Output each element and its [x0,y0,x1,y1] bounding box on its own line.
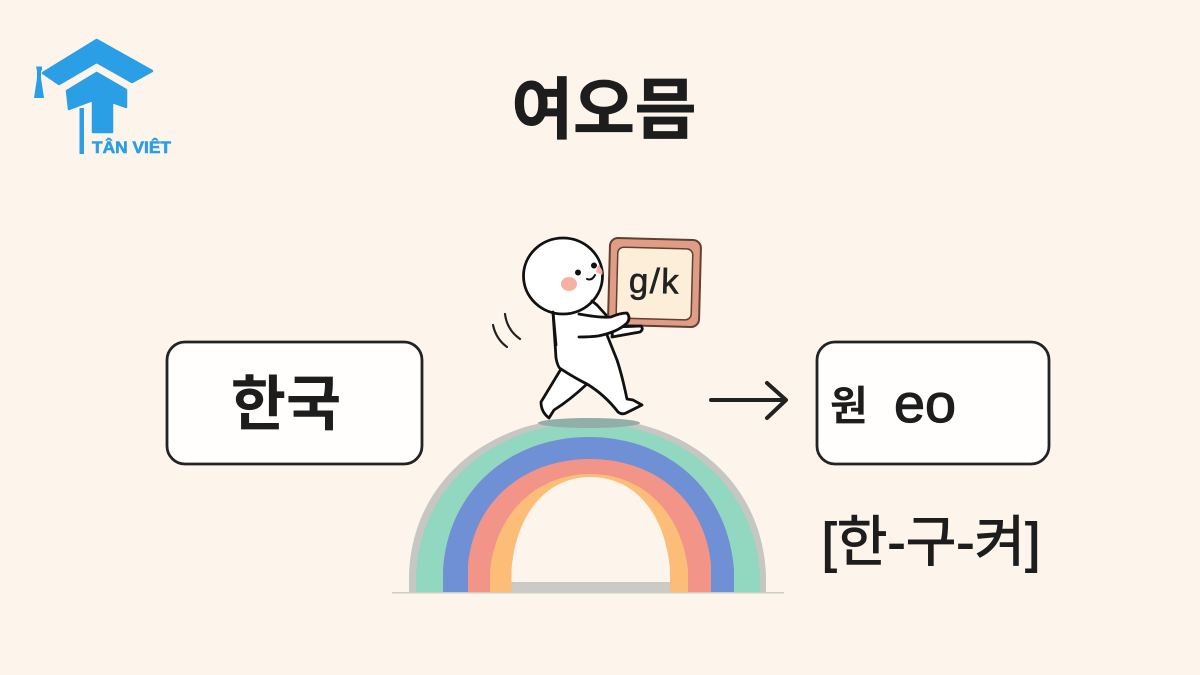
arrow [711,383,786,418]
logo: Tân Việt [34,40,171,157]
panel: left word box: 한국 [231,371,341,438]
logo: Tân Việt: TÂN VIÊT [92,138,171,157]
motion lines [493,314,520,347]
icon: g/k card [608,238,701,327]
panel: right result box: eo [894,374,956,434]
title: 여오믐 [512,73,696,148]
panel: right result box [817,342,1049,464]
character carrying the card [524,238,642,418]
panel: left word box [167,342,422,464]
pronunciation: [한-구-켜] [822,511,1040,573]
rainbow bridge [392,418,784,594]
panel: right result box: 원 [830,383,868,429]
icon: g/k card: g/k [628,261,681,302]
